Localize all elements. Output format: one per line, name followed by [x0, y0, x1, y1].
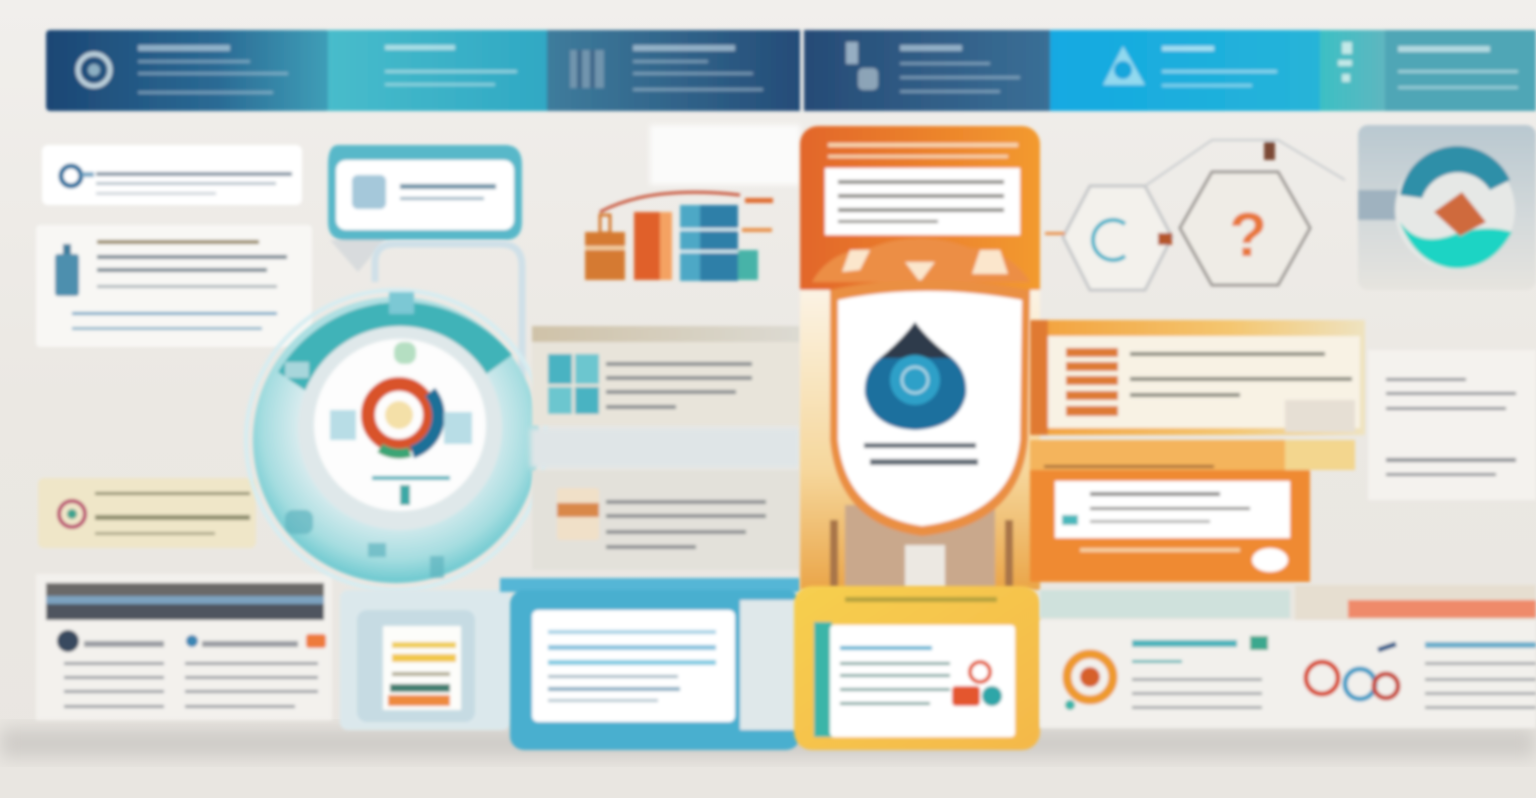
header band [46, 30, 1536, 111]
icon: header document [570, 50, 604, 88]
strip lines [1132, 636, 1536, 709]
icon: summary right [186, 634, 326, 648]
orange card lines [838, 180, 1004, 223]
panel: grid text card [532, 326, 800, 426]
icon: header ticks [1338, 42, 1352, 82]
orange card header lines [828, 143, 1018, 158]
dial tab [389, 292, 414, 314]
icon: central ring dial [246, 244, 546, 590]
panel: speech bubble [328, 145, 522, 272]
panel: orange callout [1030, 440, 1355, 582]
panel: bottle card [36, 225, 312, 347]
shield lines [864, 443, 978, 465]
icon: note badge [61, 166, 94, 186]
soft connector band [530, 428, 800, 468]
dial side tabs [330, 410, 472, 444]
icon: box [557, 488, 599, 540]
hexagon diagram [1045, 140, 1345, 290]
device bars [388, 642, 456, 706]
ring handle [375, 244, 522, 500]
dial leaf [394, 342, 416, 364]
panel: teal note [500, 578, 800, 750]
teal note lines [548, 630, 716, 702]
bottle card lines [72, 240, 287, 330]
icon: linked rings [1306, 644, 1398, 699]
icon: bubble badge [352, 175, 386, 209]
icon: bottle [55, 244, 79, 296]
note lines [96, 172, 292, 195]
bubble lines [400, 184, 496, 200]
cream legend lines [95, 492, 250, 535]
yellow heading [845, 597, 997, 602]
donut [368, 384, 438, 454]
panel: top-left note [42, 145, 302, 205]
icon: header network [1103, 46, 1145, 85]
panel: bottom-left summary [36, 574, 332, 720]
panel: yellow card [794, 586, 1040, 750]
callout bubble [1252, 548, 1288, 572]
bar chart illustration [585, 192, 773, 281]
panel: box text card [532, 470, 800, 570]
icon: top-right emblem [1358, 125, 1536, 290]
panel: bottom-right strip [1040, 585, 1536, 728]
panel: orange list card [1030, 320, 1365, 435]
icon: water drop [865, 322, 966, 430]
yellow card lines [840, 646, 950, 705]
shield [830, 280, 1030, 536]
dial baseline [372, 476, 450, 505]
arch with windows [812, 238, 1030, 282]
panel: orange central card [800, 126, 1040, 590]
grid card lines [606, 362, 752, 409]
icon: grid [548, 354, 599, 414]
icon: location ring [59, 501, 85, 527]
icon: stacked list [1066, 348, 1118, 416]
pillars [830, 505, 1013, 588]
summary band [46, 583, 324, 620]
panel: right text card [1368, 350, 1536, 500]
icon: question mark: ? [1229, 201, 1267, 270]
box card lines [606, 500, 766, 549]
header text lines [138, 45, 1518, 94]
summary lines [64, 641, 318, 708]
callout lines [1044, 465, 1250, 552]
panel: device card [340, 590, 510, 730]
icon: header tools [846, 42, 878, 90]
connector nodes [1045, 142, 1275, 245]
icon: letter C ring [1093, 220, 1125, 260]
list lines [1130, 352, 1352, 397]
panel: cream legend [38, 478, 256, 548]
dial outer marks [285, 362, 444, 578]
icon: header gear [78, 54, 110, 86]
icon: people [952, 662, 1002, 706]
icon: orange rosette [1065, 654, 1113, 710]
icon: summary left [57, 630, 79, 652]
